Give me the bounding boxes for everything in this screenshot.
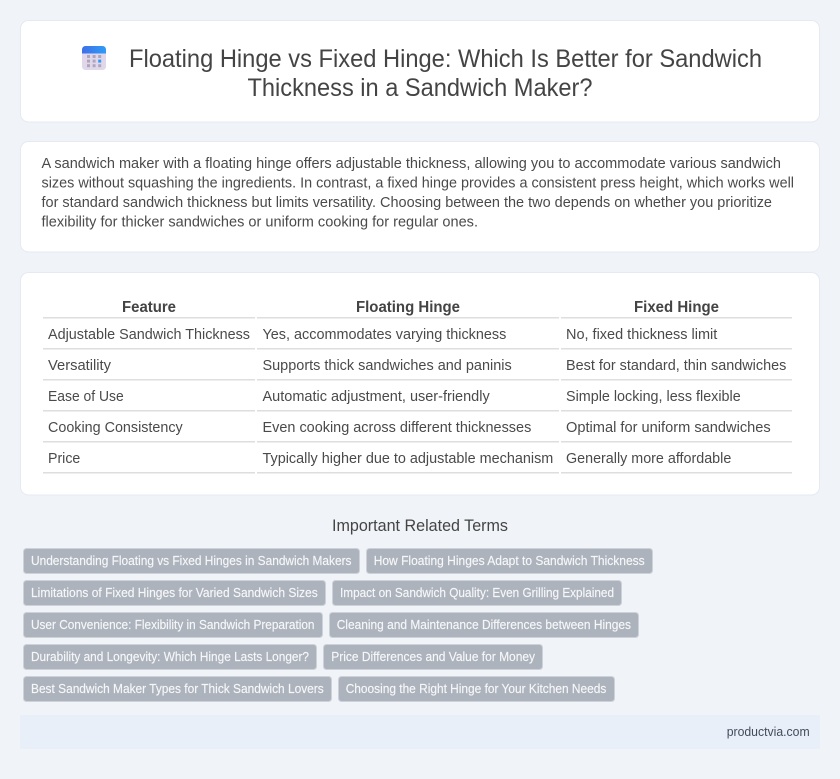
- tag: durability and longevity: Durability and Longevity: Which Hinge Lasts Longer?: [31, 650, 309, 664]
- table header row: Feature: [122, 299, 176, 316]
- tag: how floating hinges adapt: How Floating Hinges Adapt to Sandwich Thickness: [374, 554, 645, 568]
- table row: versatility: Supports thick sandwiches and paninis: [262, 358, 512, 374]
- tag: understanding hinges: [24, 548, 360, 574]
- tag: limitations of fixed hinges: Limitations of Fixed Hinges for Varied Sandwich Sizes: [31, 586, 318, 600]
- tag: choosing the right hinge: Choosing the Right Hinge for Your Kitchen Needs: [346, 682, 606, 696]
- table row: adjustable sandwich thickness: Adjustable Sandwich Thickness: [48, 327, 250, 343]
- title: Floating Hinge vs Fixed Hinge: Which Is Better for Sandwich: [129, 45, 762, 73]
- tag: impact on sandwich quality: [332, 580, 622, 606]
- table row: price: Generally more affordable: [566, 451, 731, 467]
- table row: cooking consistency: [43, 420, 792, 442]
- tag: best sandwich maker types: [24, 676, 332, 702]
- table row: versatility: Best for standard, thin sandwiches: [566, 358, 786, 374]
- intro paragraph: [42, 156, 794, 230]
- table row: adjustable sandwich thickness: [43, 327, 792, 350]
- intro paragraph: A sandwich maker with a floating hinge offers adjustable thickness, allowing you to accommodate various sandwich: [42, 156, 781, 172]
- icon: calendar: [82, 46, 106, 70]
- table header row: Floating Hinge: [356, 299, 460, 316]
- tag: user convenience: [24, 612, 322, 638]
- tag: price differences: Price Differences and Value for Money: [331, 650, 536, 664]
- panel: header: [20, 20, 820, 122]
- panel: intro text: [20, 142, 820, 252]
- tag: price differences: [324, 644, 542, 670]
- title: Thickness in a Sandwich Maker?: [248, 74, 592, 102]
- section: important related terms: [24, 517, 652, 702]
- table row: cooking consistency: Optimal for uniform sandwiches: [566, 420, 771, 436]
- section heading: Important Related Terms: [332, 517, 508, 535]
- panel: comparison table: [20, 272, 820, 495]
- table row: price: Typically higher due to adjustable mechanism: [262, 451, 553, 467]
- tag: durability and longevity: [24, 644, 316, 670]
- table row: price: [43, 451, 792, 474]
- table row: ease of use: Automatic adjustment, user-friendly: [262, 389, 490, 405]
- tag: best sandwich maker types: Best Sandwich Maker Types for Thick Sandwich Lovers: [31, 682, 324, 696]
- tag: user convenience: User Convenience: Flexibility in Sandwich Preparation: [31, 618, 314, 632]
- table row: versatility: Versatility: [48, 358, 112, 374]
- table row: adjustable sandwich thickness: Yes, accommodates varying thickness: [262, 327, 506, 343]
- table row: cooking consistency: Even cooking across different thicknesses: [262, 420, 531, 436]
- intro paragraph: flexibility for thicker sandwiches or uniform cooking for regular ones.: [42, 214, 478, 230]
- table header row: Fixed Hinge: [634, 299, 719, 316]
- intro paragraph: sizes without squashing the ingredients. In contrast, a fixed hinge provides a consistent press height, which works well: [42, 176, 794, 192]
- tag: limitations of fixed hinges: [24, 580, 326, 606]
- tag: choosing the right hinge: [338, 676, 614, 702]
- tag: impact on sandwich quality: Impact on Sandwich Quality: Even Grilling Explained: [340, 586, 614, 600]
- title: [129, 45, 762, 102]
- footer bar: [20, 715, 820, 749]
- tag: cleaning and maintenance: Cleaning and Maintenance Differences between Hinges: [337, 618, 631, 632]
- table header row: [43, 299, 792, 318]
- intro paragraph: for standard sandwich thickness but limits versatility. Choosing between the two depends on whether you prioritize: [42, 195, 772, 211]
- table row: adjustable sandwich thickness: No, fixed thickness limit: [566, 327, 717, 343]
- table row: ease of use: [43, 389, 792, 412]
- table row: ease of use: Simple locking, less flexible: [566, 389, 741, 405]
- table row: ease of use: Ease of Use: [48, 389, 124, 405]
- tag: cleaning and maintenance: [330, 612, 638, 638]
- tag: how floating hinges adapt: [366, 548, 652, 574]
- footer bar: productvia.com: [727, 725, 810, 739]
- table row: cooking consistency: Cooking Consistency: [48, 420, 183, 436]
- tag: understanding hinges: Understanding Floating vs Fixed Hinges in Sandwich Makers: [31, 554, 352, 568]
- table row: price: Price: [48, 451, 80, 467]
- table row: versatility: [43, 358, 792, 380]
